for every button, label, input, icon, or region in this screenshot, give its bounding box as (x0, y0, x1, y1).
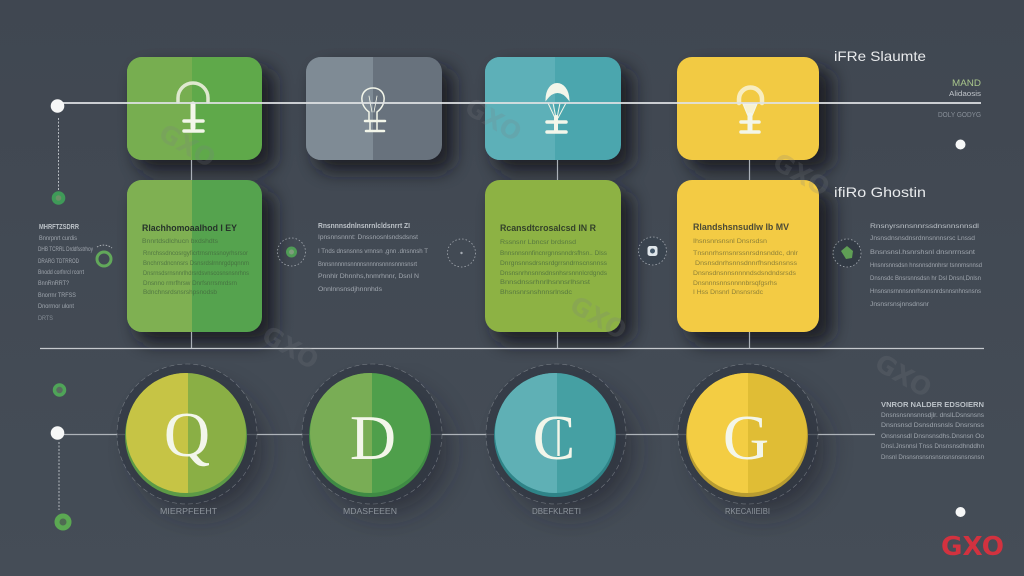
card text: Bnnsnnsnnfincnrgnnsnndrsfhsn.. Dlss (500, 250, 608, 257)
text block: centre left: Pnnhlr Dhnnhs,hnmrhnnr, Dsnl N (318, 273, 419, 280)
text block: left: Bnodd corfnrcl rcorrt (38, 269, 84, 276)
panel: teal icon card (485, 57, 621, 160)
card text: Bdnchnsrdsnsrshpsnodsb (143, 289, 217, 296)
icon: shield ring (638, 237, 666, 265)
text block: right (870, 223, 982, 308)
card heading: Rlandshsnsudlw lb MV (693, 222, 789, 232)
letter: D (350, 402, 396, 473)
card text: Dnsnsnrhnsnnsdnsnhsrsnnnlcrdgnds (500, 270, 608, 277)
vertical connectors (192, 160, 750, 348)
panel: lime text card (485, 180, 621, 332)
text block: left: DRTS (38, 315, 54, 322)
card text: I Hss Dnsnrl Dnsnsrsdc (693, 289, 764, 296)
text block: left: Bnorrnr TRFSS (38, 292, 77, 299)
card text: Dnsnnnsnnsnnnnbrsqfgsrhs (693, 280, 778, 287)
text block: right: Rnsnyrsnnsnnrssdnsnnsnnsdl (870, 223, 980, 230)
circle Q (117, 364, 257, 504)
watermarks: GXO (870, 348, 937, 403)
icon: green ring left (97, 245, 112, 266)
card text: Rssnsnr Lbncsr brdsnsd (500, 239, 576, 246)
text block: left: BnnRnRRT? (38, 280, 69, 287)
card text: Dnsnsdnrhsnnsdnnrfhsndsnsnss (695, 260, 798, 267)
legend: top right: Alidaosis (949, 91, 982, 98)
panel: green icon card (127, 57, 262, 160)
text block: right: Dnsnsdc Bnsrsnnsdsn hr Dsl Dnsnl,Dnlsn (870, 275, 981, 282)
watermarks (154, 92, 937, 403)
circle G (678, 364, 818, 504)
text block: centre left: Ipnsnnsnnnt: Dnssnosnlsndsdsnst (318, 234, 418, 241)
card text (142, 238, 250, 296)
text block: bottom right: VNROR NALDER EDSOIERN (881, 400, 984, 409)
circle captions: MIERPFEEHT (160, 507, 217, 516)
text block: bottom right (881, 400, 985, 461)
watermarks: GXO (768, 147, 835, 202)
letter: C (533, 402, 575, 473)
legend: top right: MAND (952, 78, 981, 89)
legend: top right: DOLY GODYG (938, 110, 981, 119)
text block: bottom right: Onsnsnsdl Dnsnsnsdhs.Dnsnsn Oo (881, 433, 984, 440)
logo: GXO (941, 532, 1004, 562)
card text: Dnsnsdnsnnsnnnndsdsndndsrsds (693, 270, 797, 277)
text block: bottom right: Dnsnsnsnnsnnsdjlr. dnslLDsnsnsns (881, 412, 985, 419)
circle captions (160, 507, 770, 516)
circle captions: DBEFKLRETI (532, 507, 581, 516)
card text: Dnsnno rmrfhrsw Dnrfsnrrsmrdsrn (143, 280, 237, 287)
watermarks: GXO (460, 92, 527, 147)
text block: right: Bnsnsnsl.hsnrshsnl dnsnrrnssnt (870, 249, 975, 256)
divider (40, 348, 984, 350)
text block: left: Dnorrnor ulont (38, 303, 74, 310)
text block: right: Hnsnrsnnsdsn hnsnnsdnnhrsr tsnnrnsnnsd (870, 262, 982, 269)
card heading: Rcansdtcrosalcsd IN R (500, 223, 596, 233)
text block: right: Jnsnsrsnsjnnsdnsnr (870, 301, 930, 308)
text block: left (38, 222, 94, 322)
watermarks: GXO (154, 118, 221, 173)
heading: middle right: ifiRo Ghostin (834, 184, 926, 200)
panel: grey icon card (306, 57, 442, 160)
circle D (302, 364, 442, 504)
icon: dashed ring 1 (278, 238, 306, 266)
node: green upper (54, 385, 64, 395)
card text: Bnchrrsdncnnsrs Dsnsrdslrnnrgdpqnnm (143, 260, 249, 267)
node: top left (51, 99, 64, 113)
node: bottom left (51, 426, 64, 440)
icon: teal bulb (546, 84, 569, 132)
text block: left: Bnnrpnrt curdis (39, 235, 78, 242)
icon: dashed ring 2 (448, 239, 476, 267)
watermarks: GXO (565, 290, 632, 345)
watermarks: GXO (257, 320, 324, 375)
node: bottom right (956, 507, 966, 517)
text block: centre left: Bnnsnnnnnsnnnnsnnnnsnnnsnnnsnsrt (318, 261, 417, 268)
text block: bottom right: Dnsl.Jnsnnsl Tnss Dnsnsnsdhnddhn (881, 443, 984, 450)
panel: yellow text card (677, 180, 819, 332)
node: top right (956, 140, 966, 150)
circle C (486, 364, 626, 504)
text block: right: Jnsnsdnsnsdnsrdnnsnnnsrsc Lnssd (870, 235, 975, 242)
text block: bottom right: Dnsnl Dnsnsnsnsnsnsnsnsnsnsnsnsn (881, 454, 984, 461)
text block: bottom right: Dnsnsnsd Dsnsdnsnsls Dnsrsnss (881, 422, 985, 429)
panel: yellow icon card (677, 57, 819, 160)
circle shadows (138, 388, 824, 512)
text block: centre left: I Tnds dnsnsnns vrnnsn ,gnn .dnsnnsh T (318, 248, 428, 255)
card text: Rnrchssdncosrgyficrtrnsrnssnoyrhsrsor (143, 250, 249, 257)
node: green top left (52, 191, 65, 205)
icon: leaf ring (833, 239, 861, 267)
node: green lower (57, 516, 69, 528)
letter: G (723, 402, 769, 473)
text block: right: Hnsnsnsrnnnsnnrhsnnsnrdsnnsnhnsnsns (870, 288, 982, 295)
text block: centre left (318, 223, 428, 293)
card text: Bhsnsnrsnshnnsrlnsdc (500, 289, 573, 296)
circle captions: RKECAIIEIBI (725, 507, 770, 516)
timeline top (51, 99, 981, 190)
text block: centre left: Rnsnnnsdnlnsnrnlcldsnrrt ZI (318, 223, 410, 230)
card heading: Rlachhomoaalhod I EY (142, 223, 237, 233)
text block: left: DRARG TDTRROD (38, 258, 79, 265)
text block: centre left: Onnlnnsnsdjhnnnhds (318, 286, 383, 293)
card text: Bnnsdnssrhnrlhsnnsrlhsnst (500, 279, 590, 286)
letter: Q (164, 399, 210, 470)
icon: grey bulb (362, 88, 385, 131)
card shadows (137, 68, 832, 343)
card text (693, 238, 799, 296)
text block: left: DHB TCRRL Drddfsstrhoy (38, 246, 94, 253)
panel: green text card (127, 180, 262, 332)
icon: green bulb (178, 83, 208, 131)
card text: Tnsnnrhsrnsnrssnrsdnsnddc, dnlr (693, 250, 799, 257)
card text: Ihsnsnnsnsnl Dnsrsdsn (693, 238, 767, 245)
card text: Dnrgnsnnsdrsnsrdgrrsndrnscnsnnss (500, 260, 608, 267)
icon: yellow bulb (739, 88, 762, 132)
card text: Dnsrnsdsrnsnnrlhdrsrdsvnscosnsnsnrhns (143, 270, 250, 277)
card text (500, 239, 608, 296)
timeline bottom (51, 426, 875, 510)
circle captions: MDASFEEEN (343, 507, 397, 516)
heading: top right: iFRe Slaumte (834, 48, 926, 64)
text block: left: MHRFTZSDRR (39, 222, 79, 231)
card text: Bnnrtdsdlchucn bxdshdts (142, 238, 219, 245)
legend: top right (938, 78, 982, 119)
